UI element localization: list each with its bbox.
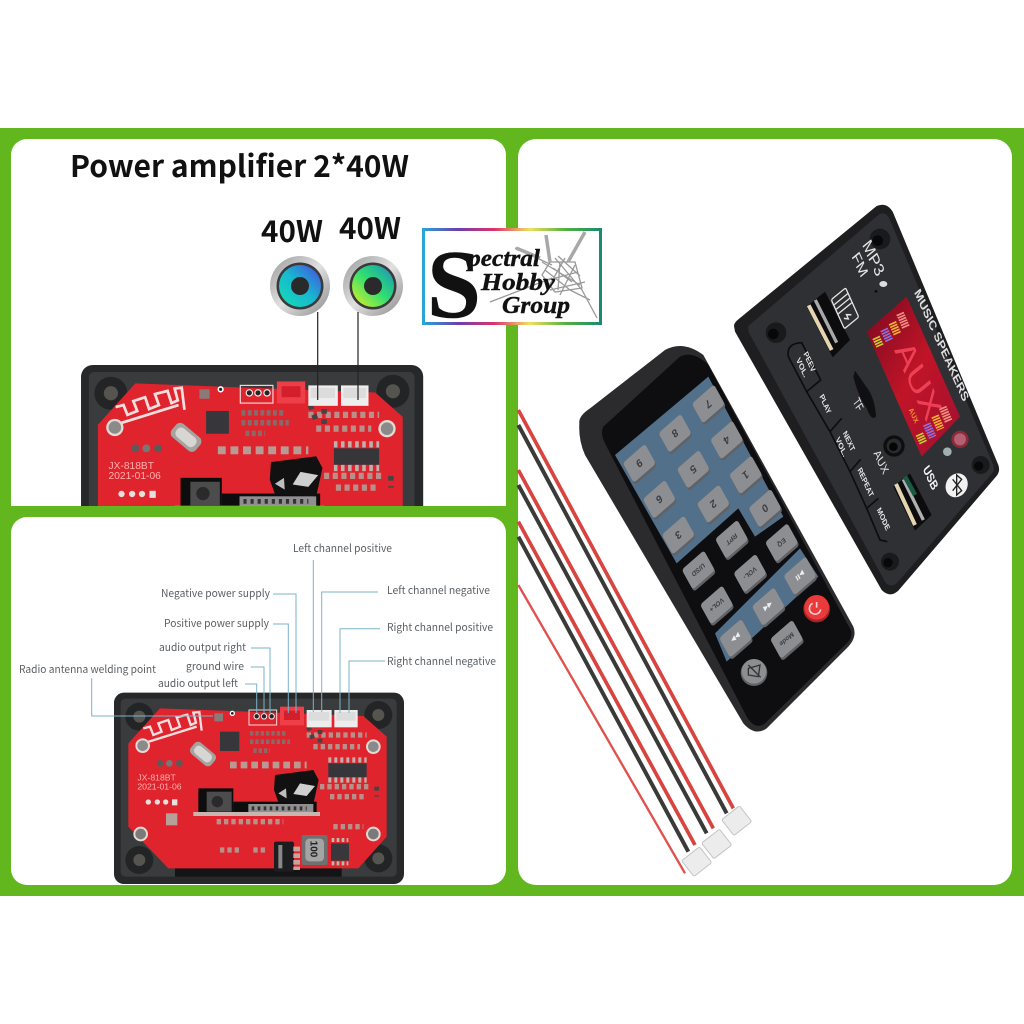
button labels: VOL.: [834, 435, 849, 459]
robot sketch: [490, 232, 597, 318]
leader lines: [92, 560, 385, 716]
key: previous: ▶▶: [729, 631, 741, 645]
pin labels: Left channel negative: [387, 583, 490, 598]
button labels: NEXT: [841, 429, 857, 454]
key: 6: 6: [654, 492, 664, 506]
button labels: REPEAT: [856, 466, 875, 499]
board photo: bottom: JX-818BT: [137, 773, 177, 783]
arrow: speaker wires: [318, 312, 358, 400]
key: 0: [748, 489, 783, 530]
button labels: PLAY: [818, 392, 833, 416]
button labels: [794, 350, 892, 532]
membrane buttons: [788, 343, 887, 542]
key: 7: 7: [703, 396, 713, 411]
remote control: [579, 346, 855, 732]
module front panel: [734, 205, 999, 594]
usb port bottom: [893, 473, 932, 531]
display: AUX: [907, 406, 920, 425]
green background band: [0, 128, 1024, 896]
icon: bluetooth: [941, 469, 972, 501]
text: TF: TF: [850, 395, 866, 414]
key: previous: [719, 619, 754, 660]
key: VOL-: [733, 554, 768, 595]
key: VOL+: VOL+: [708, 595, 725, 613]
key: play pause: ▶II: [794, 569, 805, 582]
key: 7: [692, 384, 726, 426]
key: 9: 9: [634, 456, 644, 470]
button: power: [803, 595, 830, 622]
aux jack: [883, 435, 905, 457]
icon: right speaker: [343, 256, 403, 316]
display: AUX: [889, 333, 948, 428]
text: MUSIC SPEAKERS: MUSIC SPEAKERS: [912, 287, 971, 405]
text: AUX: AUX: [871, 448, 890, 478]
board photo: top: JX-818BT: [109, 461, 154, 472]
board photo: bottom: 100: [308, 841, 319, 858]
pin labels: Negative power supply: [161, 586, 270, 601]
ir sensor: [943, 431, 969, 456]
key: 5: [677, 450, 711, 491]
display: [867, 297, 960, 457]
key: 2: 2: [708, 496, 718, 511]
icon: mic: [875, 281, 887, 293]
key: 6: [643, 480, 677, 521]
pin labels: audio output left: [158, 676, 238, 691]
panel: pinout: [11, 517, 506, 885]
key: 3: [662, 515, 696, 557]
pin labels: ground wire: [186, 659, 244, 674]
label: left 40W: 40W: [261, 207, 323, 251]
logo word: pectral: pectral: [466, 246, 540, 272]
pin labels: Positive power supply: [164, 616, 269, 631]
board photo: top: 2021-01-06: [109, 471, 161, 482]
key: play pause: [783, 556, 818, 598]
key: 4: [710, 420, 745, 462]
key: 8: [658, 414, 693, 455]
key: EQ: EQ: [776, 536, 787, 548]
button: mute: [741, 659, 767, 686]
module front panel: FM: [849, 248, 871, 280]
key: EQ: [765, 523, 800, 565]
key: RPT: [715, 520, 750, 561]
logo: Spectral Hobby Group: [422, 228, 602, 338]
button labels: PEEV: [802, 350, 818, 375]
panel: power amplifier: [11, 139, 506, 506]
tf slot: [853, 371, 876, 418]
pin labels: Right channel negative: [387, 654, 496, 669]
label: right 40W: 40W: [339, 204, 401, 248]
logo word: Group: Group: [502, 293, 570, 319]
key: 0: 0: [759, 501, 770, 515]
key: 4: 4: [721, 432, 731, 447]
key: next: ◀◀: [762, 599, 774, 614]
key: 3: 3: [673, 527, 683, 542]
wires: [518, 410, 752, 877]
key: VOL+: [700, 585, 735, 627]
pin labels: Radio antenna welding point: [19, 662, 156, 677]
icon: left speaker: [270, 256, 330, 316]
connectors: [682, 806, 752, 877]
logo letter S: S: [427, 231, 481, 338]
key: U/SD: [682, 550, 716, 592]
icon: battery: [831, 288, 859, 329]
screw holes: [766, 229, 990, 571]
pin labels: [19, 541, 496, 691]
key: Mode: [770, 620, 805, 661]
key: RPT: RPT: [725, 531, 738, 546]
button labels: VOL.: [794, 356, 810, 379]
text: MP3 FM: MP3: [859, 237, 887, 280]
pin labels: Left channel positive: [293, 541, 392, 556]
panel: product photo: [518, 139, 1012, 885]
key: 1: [729, 455, 764, 497]
button labels: MODE: [875, 506, 892, 532]
usb port top: [807, 292, 850, 357]
key: 5: 5: [688, 462, 698, 476]
key: VOL-: VOL-: [742, 564, 757, 581]
key: 8: 8: [669, 426, 680, 440]
board photo: top: [81, 365, 424, 506]
logo word: Hobby: Hobby: [480, 270, 555, 296]
key: 9: [623, 444, 657, 485]
board photo: bottom: 2021-01-06: [137, 781, 182, 791]
key: U/SD: U/SD: [690, 561, 706, 578]
pin labels: Right channel positive: [387, 620, 493, 635]
pin labels: audio output right: [159, 640, 246, 655]
title: Power amplifier 2*40W: [70, 142, 409, 186]
key: 2: [697, 484, 731, 526]
key: 1: 1: [740, 467, 750, 482]
key: next: [752, 587, 786, 629]
board photo: bottom: [114, 693, 404, 884]
text: USB: USB: [920, 462, 941, 493]
key: Mode: Mode: [778, 630, 795, 648]
